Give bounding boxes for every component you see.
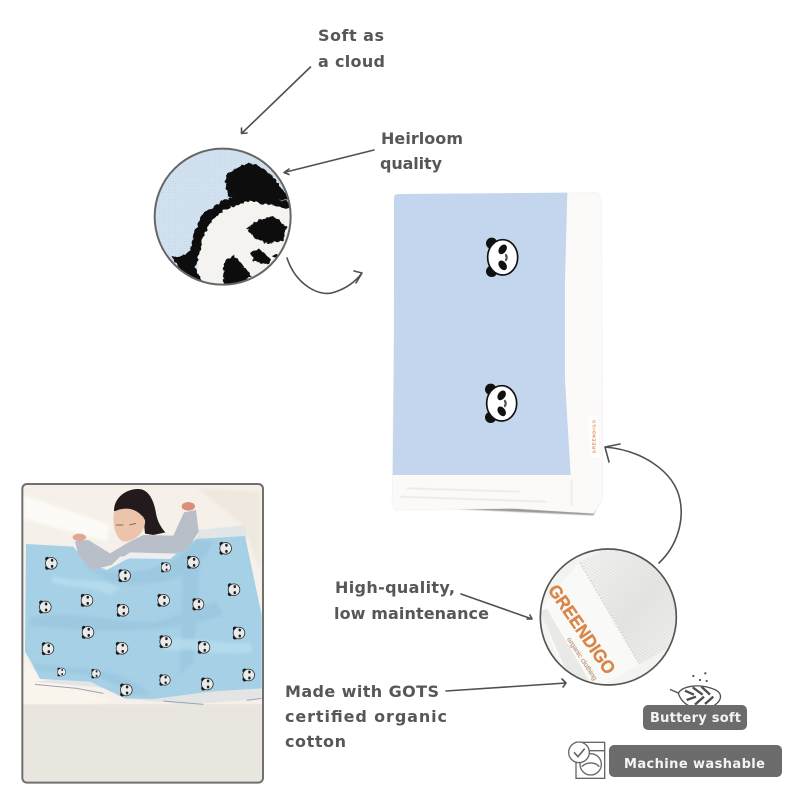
arrow: GOTS to label swatch bbox=[446, 679, 566, 691]
arrow: washable label to blanket bbox=[605, 444, 681, 563]
white blanket border bbox=[392, 193, 603, 513]
arrow: swatch to blanket bbox=[287, 258, 362, 293]
arrow: high-quality to label swatch bbox=[461, 594, 532, 619]
bed sheet bbox=[22, 484, 263, 711]
text: soft as a cloud: a cloud bbox=[318, 52, 385, 71]
blue blanket panel bbox=[393, 193, 571, 475]
panda motif bottom bbox=[485, 384, 517, 423]
sewn label: GREENDIGO bbox=[591, 419, 596, 453]
text: made with GOTS certified organic cotton: certified organic bbox=[285, 707, 447, 726]
swatch circle: panda knit close-up bbox=[153, 147, 293, 290]
photo blanket bbox=[25, 536, 262, 699]
beige lower panel bbox=[22, 704, 263, 784]
badge: machine washable bbox=[609, 745, 782, 777]
brand tagline: organic clothing bbox=[565, 636, 598, 682]
text: high-quality low maintenance bbox=[334, 578, 489, 623]
folded blanket edge bbox=[114, 552, 177, 563]
text: heirloom quality: quality bbox=[380, 154, 443, 173]
text: heirloom quality: Heirloom bbox=[381, 129, 463, 148]
text: soft as a cloud bbox=[318, 26, 385, 71]
brand name: GREENDIGO bbox=[544, 581, 619, 678]
blanket shadow edge bbox=[418, 505, 597, 515]
hair bbox=[114, 489, 165, 535]
hands bbox=[73, 534, 86, 541]
text: made with GOTS certified organic cotton: cotton bbox=[285, 732, 346, 751]
folded blanket bbox=[392, 193, 603, 515]
sleeping baby body and arms bbox=[75, 510, 199, 570]
photo: sleeping baby under blanket bbox=[22, 484, 263, 784]
photo blanket panda pattern bbox=[39, 542, 254, 696]
icon: feather with sparkles bbox=[670, 672, 720, 706]
sewn label bbox=[587, 416, 600, 457]
text: soft as a cloud: Soft as bbox=[318, 26, 384, 45]
icon: washing machine with check bbox=[569, 742, 605, 778]
arrow: soft as a cloud to swatch bbox=[242, 67, 310, 134]
text: made with GOTS certified organic cotton: Made with GOTS bbox=[285, 682, 439, 701]
swatch circle: greendigo label close-up bbox=[540, 548, 677, 687]
text: high-quality low maintenance: low maintenance bbox=[334, 604, 489, 623]
badge: buttery soft bbox=[643, 705, 747, 730]
panda motif top bbox=[486, 238, 518, 277]
text: made with GOTS certified organic cotton bbox=[285, 682, 447, 751]
text: heirloom quality bbox=[380, 129, 463, 173]
blanket white edge bbox=[197, 525, 247, 539]
arrow: heirloom quality to swatch bbox=[284, 150, 374, 174]
face bbox=[113, 509, 145, 542]
badge: buttery soft: Buttery soft bbox=[650, 711, 741, 726]
baby bbox=[73, 489, 199, 570]
text: high-quality low maintenance: High-quality, bbox=[335, 578, 455, 597]
badge: machine washable: Machine washable bbox=[624, 757, 765, 772]
